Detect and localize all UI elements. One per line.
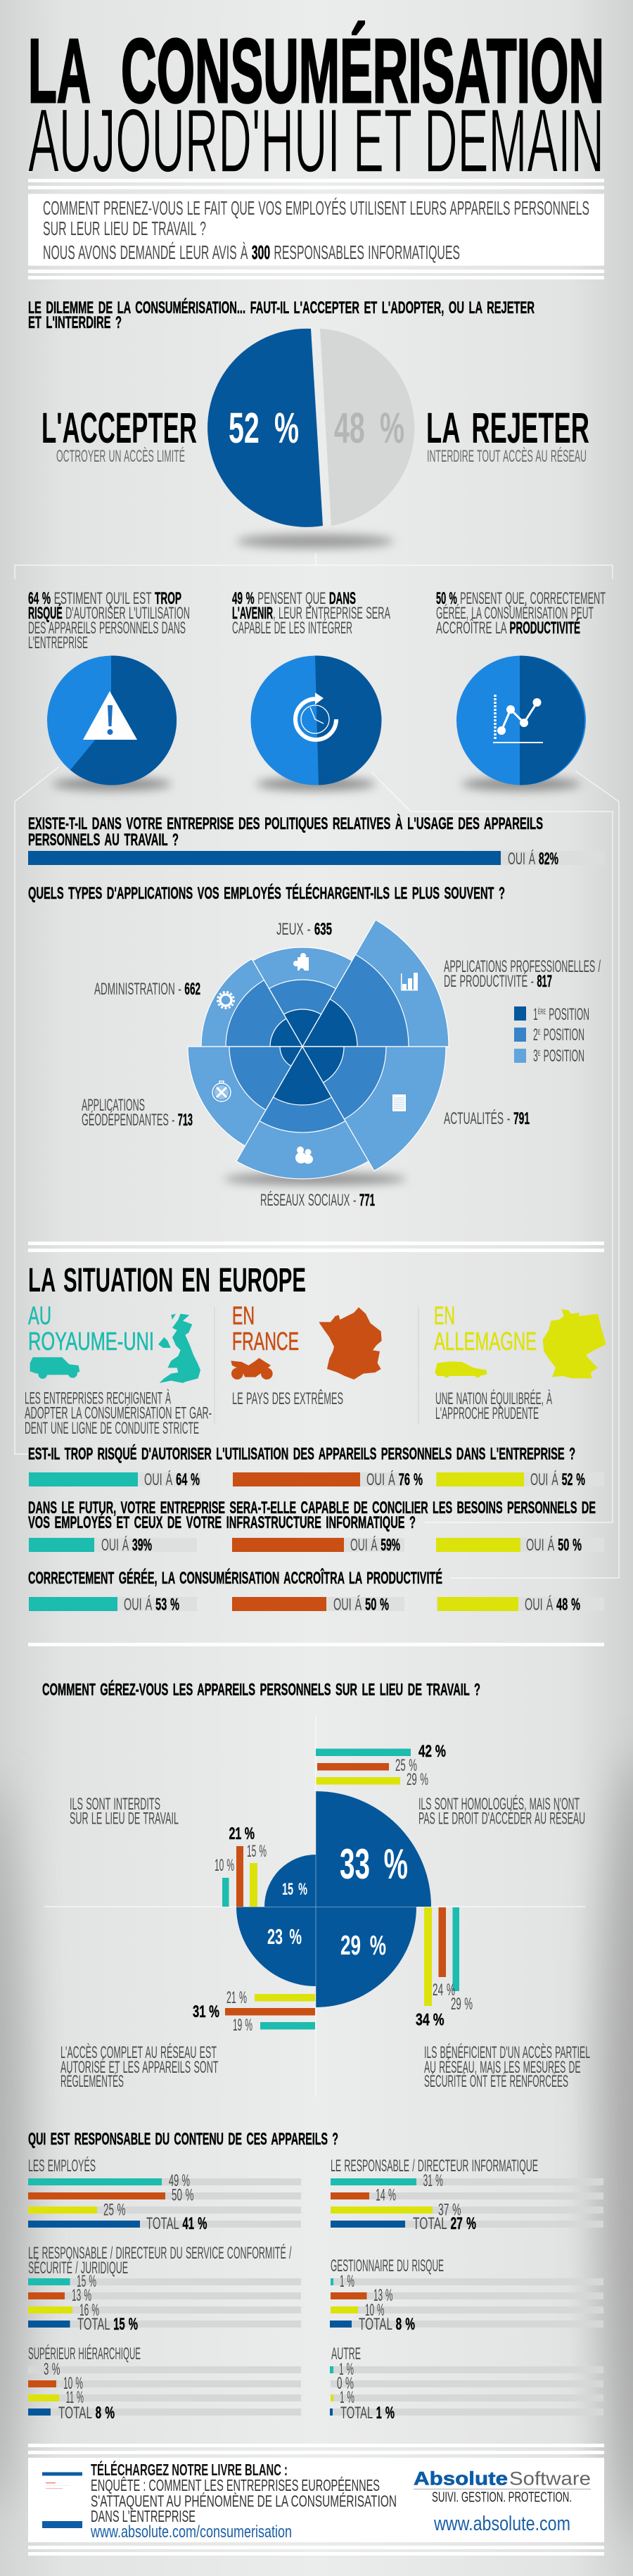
- bars: homologués: 25 %: [395, 1756, 417, 1775]
- quadrant chart: 23 %: [267, 1924, 302, 1949]
- pie chart: accepter / rejeter: 52 %: [229, 404, 299, 452]
- question row: futur: OUI Á 50 %: [526, 1536, 582, 1555]
- pie chart: accepter / rejeter: [207, 329, 414, 548]
- call to action text: S'ATTAQUENT AU PHÉNOMÈNE DE LA CONSUMÉRISATION: [91, 2492, 397, 2510]
- group: supérieur hiérarchique: 11 %: [66, 2388, 84, 2407]
- heading: dilemme: ET L'INTERDIRE ?: [28, 313, 122, 332]
- icon: people: [295, 1147, 313, 1164]
- quadrant chart: [44, 1717, 585, 2097]
- quadrant descriptions: ILS SONT INTERDITS: [70, 1795, 160, 1814]
- text block: 50 %: ACCROÎTRE LA PRODUCTIVITÉ: [436, 618, 580, 638]
- description: LES ENTREPRISES RECHIGNENT À: [25, 1389, 171, 1408]
- rose chart labels: ADMINISTRATION - 662: [94, 980, 200, 999]
- circle: warning 64 %: [47, 655, 177, 790]
- text: SUPÉRIEUR HIÉRARCHIQUE: [28, 2344, 141, 2363]
- rose chart labels: [82, 920, 601, 1210]
- bars: accès partiel: 34 %: [416, 2010, 445, 2030]
- question row: productivité: OUI Á 53 %: [124, 1595, 179, 1615]
- group: autre: 1 %: [340, 2388, 354, 2407]
- quadrant chart: 33 %: [340, 1841, 408, 1888]
- group: les employés: 49 %: [169, 2171, 190, 2190]
- question row: trop risqué: [28, 1444, 604, 1489]
- question row: productivité: [28, 1568, 604, 1615]
- legend: POSITION: [541, 1025, 584, 1044]
- group: gestionnaire du risque: 1 %: [340, 2272, 354, 2291]
- call to action text: DANS L'ENTREPRISE: [91, 2507, 196, 2525]
- rose chart labels: GÉODÉPENDANTES - 713: [82, 1111, 193, 1130]
- rose chart: [188, 920, 449, 1185]
- bars: homologués: 29 %: [407, 1770, 428, 1789]
- bars: accès complet: 19 %: [233, 2016, 252, 2035]
- question: politiques: PERSONNELS AU TRAVAIL ?: [28, 831, 179, 850]
- question row: futur: [28, 1498, 604, 1555]
- group: conformité: SÉCURITÉ / JURIDIQUE: [28, 2259, 128, 2278]
- group: conformité: [28, 2244, 292, 2334]
- bars: interdits: 21 %: [229, 1824, 255, 1843]
- circle: chart 50 %: [456, 656, 586, 790]
- text: POSITION: [546, 1005, 589, 1024]
- logo: Absolute Software: Software: [509, 2468, 591, 2489]
- circle: clock 49 %: [250, 655, 381, 790]
- title: [28, 20, 604, 191]
- quadrant descriptions: RÉGLEMENTÉS: [60, 2072, 124, 2091]
- text block: 50 %: [436, 589, 606, 638]
- icon: car: [435, 1361, 487, 1377]
- question row: productivité: OUI Á 50 %: [333, 1595, 389, 1615]
- panel: Allemagne: EN: [434, 1301, 455, 1330]
- text block: 49 %: 49 % PENSENT QUE DANS: [232, 589, 356, 608]
- rose chart labels: JEUX - 635: [276, 920, 332, 939]
- group: gestionnaire du risque: TOTAL 8 %: [359, 2315, 415, 2334]
- bars: accès partiel: 24 %: [433, 1981, 455, 2000]
- question row: trop risqué: OUI Á 64 %: [144, 1470, 200, 1489]
- panel: France: EN: [232, 1301, 255, 1330]
- map: UK: [158, 1314, 200, 1383]
- logo: Absolute Software: [414, 2468, 591, 2535]
- rose chart labels: DE PRODUCTIVITÉ - 817: [444, 972, 552, 991]
- group: supérieur hiérarchique: [28, 2344, 141, 2423]
- group: les employés: [28, 2157, 207, 2233]
- description: [435, 1389, 552, 1423]
- heading: responsable: QUI EST RESPONSABLE DU CONTENU DE CES APPAREILS ?: [28, 2130, 338, 2149]
- panel: Royaume-Uni: ROYAUME-UNI: [28, 1327, 154, 1356]
- logo: Absolute Software: Absolute: [414, 2468, 508, 2489]
- group: directeur informatique: 37 %: [438, 2200, 461, 2220]
- question row: futur: OUI Á 39%: [101, 1536, 152, 1555]
- group: conformité: TOTAL 15 %: [77, 2315, 138, 2334]
- bars: homologués: [316, 1742, 446, 1789]
- rose chart labels: RÉSEAUX SOCIAUX - 771: [260, 1191, 375, 1210]
- text block: 64 %: 64 % ESTIMENT QU'IL EST TROP: [28, 589, 181, 608]
- group: directeur informatique: [331, 2157, 538, 2233]
- label: accepter: [41, 404, 197, 466]
- description: [25, 1389, 212, 1438]
- legend: 3: [533, 1047, 542, 1066]
- icon: compass: [212, 1081, 231, 1101]
- question row: trop risqué: OUI Á 52 %: [530, 1470, 585, 1489]
- label: accepter: L'ACCEPTER: [41, 404, 197, 452]
- heading: dilemme: [28, 298, 535, 332]
- section heading: Europe: [28, 1242, 604, 1299]
- group: les employés: 25 %: [103, 2200, 125, 2220]
- group: autre: 0 %: [337, 2374, 354, 2393]
- tracks: [28, 2178, 603, 2416]
- panel: Allemagne: ALLEMAGNE: [434, 1327, 537, 1356]
- group: directeur informatique: 14 %: [376, 2186, 396, 2204]
- legend: 2: [533, 1025, 542, 1044]
- legend: POSITION: [541, 1047, 584, 1066]
- group: gestionnaire du risque: 13 %: [373, 2286, 392, 2305]
- call to action text: TÉLÉCHARGEZ NOTRE LIVRE BLANC :: [91, 2460, 288, 2479]
- panel: Royaume-Uni: [25, 1301, 212, 1438]
- group: gestionnaire du risque: 10 %: [365, 2301, 384, 2320]
- title: LA: [28, 20, 91, 122]
- panel: Royaume-Uni: AU: [28, 1301, 51, 1330]
- legend: E: [538, 1028, 541, 1037]
- group: supérieur hiérarchique: 3 %: [44, 2360, 60, 2379]
- icon: gear: [218, 992, 234, 1008]
- group: gestionnaire du risque: [330, 2256, 444, 2334]
- quadrant chart: 29 %: [340, 1931, 386, 1961]
- call to action text: [90, 2460, 397, 2542]
- text block: 64 %: [28, 589, 190, 652]
- call to action text: www.absolute.com/consumerisation: [90, 2523, 292, 2542]
- panel: France: [231, 1301, 382, 1408]
- group: autre: [330, 2344, 395, 2423]
- quadrant descriptions: [60, 1795, 590, 2091]
- icon: document: [392, 1094, 406, 1111]
- legend: ÈRE: [538, 1007, 546, 1016]
- group: conformité: 13 %: [72, 2286, 91, 2305]
- text block: 49 %: L'AVENIR, LEUR ENTREPRISE SERA: [232, 604, 390, 623]
- group: conformité: 16 %: [79, 2301, 99, 2320]
- group: les employés: LES EMPLOYÉS: [28, 2157, 96, 2176]
- group: les employés: TOTAL 41 %: [146, 2214, 207, 2233]
- bars: accès partiel: 29 %: [451, 1995, 473, 2014]
- group: les employés: 50 %: [172, 2186, 194, 2204]
- text: 15 %: [247, 1842, 267, 1861]
- text block: 64 %: RISQUÉ D'AUTORISER L'UTILISATION: [28, 603, 190, 623]
- group: directeur informatique: 31 %: [423, 2171, 443, 2190]
- description: ADOPTER LA CONSUMÉRISATION ET GAR-: [25, 1403, 212, 1423]
- bars: accès partiel: [416, 1907, 473, 2030]
- group: directeur informatique: TOTAL 27 %: [413, 2214, 476, 2233]
- icon: jeep: [30, 1357, 79, 1379]
- footer panel: [28, 2444, 604, 2556]
- quadrant chart: 15 %: [282, 1880, 307, 1899]
- rose chart labels: ACTUALITÉS - 791: [444, 1109, 530, 1128]
- description: LE PAYS DES EXTRÊMES: [232, 1389, 343, 1408]
- bars: interdits: [215, 1824, 267, 1907]
- section heading: Europe: LA SITUATION EN EUROPE: [28, 1262, 306, 1299]
- map: France: [319, 1307, 382, 1379]
- bars: accès complet: [193, 1988, 315, 2035]
- intro panel: NOUS AVONS DEMANDÉ LEUR AVIS À 300 RESPONSABLES INFORMATIQUES: [43, 241, 460, 263]
- quadrant descriptions: SUR LE LIEU DE TRAVAIL: [70, 1809, 179, 1829]
- label: rejeter: [426, 404, 589, 466]
- group: conformité: 15 %: [77, 2272, 96, 2291]
- call to action text: ENQUÊTE : COMMENT LES ENTREPRISES EUROPÉENNES: [91, 2476, 380, 2494]
- legend: E: [538, 1049, 541, 1058]
- bars: accès complet: 21 %: [226, 1988, 247, 2007]
- icon: puzzle: [293, 953, 309, 973]
- group: conformité: LE RESPONSABLE / DIRECTEUR DU SERVICE CONFORMITÉ /: [28, 2244, 292, 2263]
- legend: 1: [533, 1005, 542, 1024]
- logo: Absolute Software: www.absolute.com: [433, 2513, 570, 2535]
- group: supérieur hiérarchique: TOTAL 8 %: [58, 2404, 115, 2423]
- text: GESTIONNAIRE DU RISQUE: [331, 2256, 444, 2275]
- text block: 49 %: [232, 589, 390, 638]
- panel: France: FRANCE: [232, 1327, 299, 1356]
- rose chart labels: APPLICATIONS: [82, 1096, 145, 1115]
- bars: interdits: 10 %: [215, 1856, 234, 1875]
- question: politiques: OUI Á 82%: [508, 850, 558, 869]
- map: Germany: [543, 1309, 606, 1378]
- quadrant descriptions: L'ACCÈS COMPLET AU RÉSEAU EST: [60, 2043, 217, 2062]
- question: politiques: [28, 814, 605, 869]
- question row: trop risqué: OUI Á 76 %: [366, 1470, 423, 1489]
- text block: 64 %: L'ENTREPRISE: [28, 633, 88, 652]
- bars: homologués: 42 %: [418, 1742, 446, 1761]
- white paper thumbnail: [42, 2472, 82, 2528]
- pie chart: accepter / rejeter: 48 %: [334, 404, 404, 452]
- group: autre: AUTRE: [331, 2344, 361, 2363]
- legend: [514, 1005, 589, 1066]
- text block: 49 %: CAPABLE DE LES INTÉGRER: [232, 619, 352, 638]
- frame lines top section: [15, 553, 619, 1578]
- group: autre: TOTAL 1 %: [340, 2404, 395, 2423]
- bars: accès complet: 31 %: [193, 2002, 219, 2021]
- icon: motorcycle: [231, 1358, 273, 1379]
- text block: 64 %: DES APPAREILS PERSONNELS DANS: [28, 619, 186, 638]
- question row: productivité: OUI Á 48 %: [525, 1595, 580, 1615]
- intro panel: [28, 179, 604, 279]
- group: autre: 1 %: [339, 2360, 354, 2379]
- question row: futur: OUI Á 59%: [350, 1536, 400, 1555]
- panel: Allemagne: [434, 1301, 606, 1423]
- icon: bars: [401, 973, 418, 991]
- label: accepter: OCTROYER UN ACCÈS LIMITÉ: [56, 447, 185, 466]
- group: supérieur hiérarchique: 10 %: [63, 2374, 83, 2393]
- intro panel: SUR LEUR LIEU DE TRAVAIL ?: [43, 217, 206, 239]
- description: DENT UNE LIGNE DE CONDUITE STRICTE: [25, 1419, 199, 1438]
- quadrant descriptions: AUTORISÉ ET LES APPAREILS SONT: [60, 2058, 219, 2077]
